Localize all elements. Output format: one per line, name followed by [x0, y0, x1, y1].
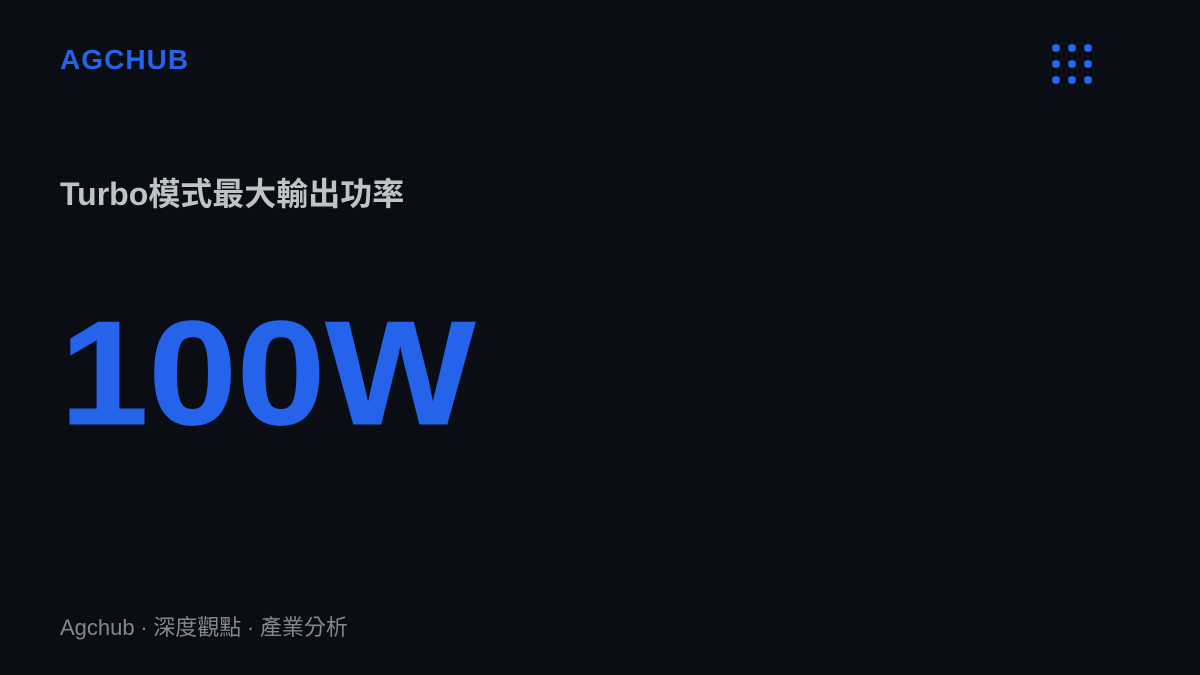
footer text: Agchub · 深度觀點 · 產業分析 [60, 615, 348, 640]
brand logo text: AGCHUB [60, 44, 189, 75]
heading: Turbo模式最大輸出功率 [60, 176, 404, 212]
big number: 100W [60, 290, 475, 456]
icon: dot grid [1052, 44, 1092, 84]
